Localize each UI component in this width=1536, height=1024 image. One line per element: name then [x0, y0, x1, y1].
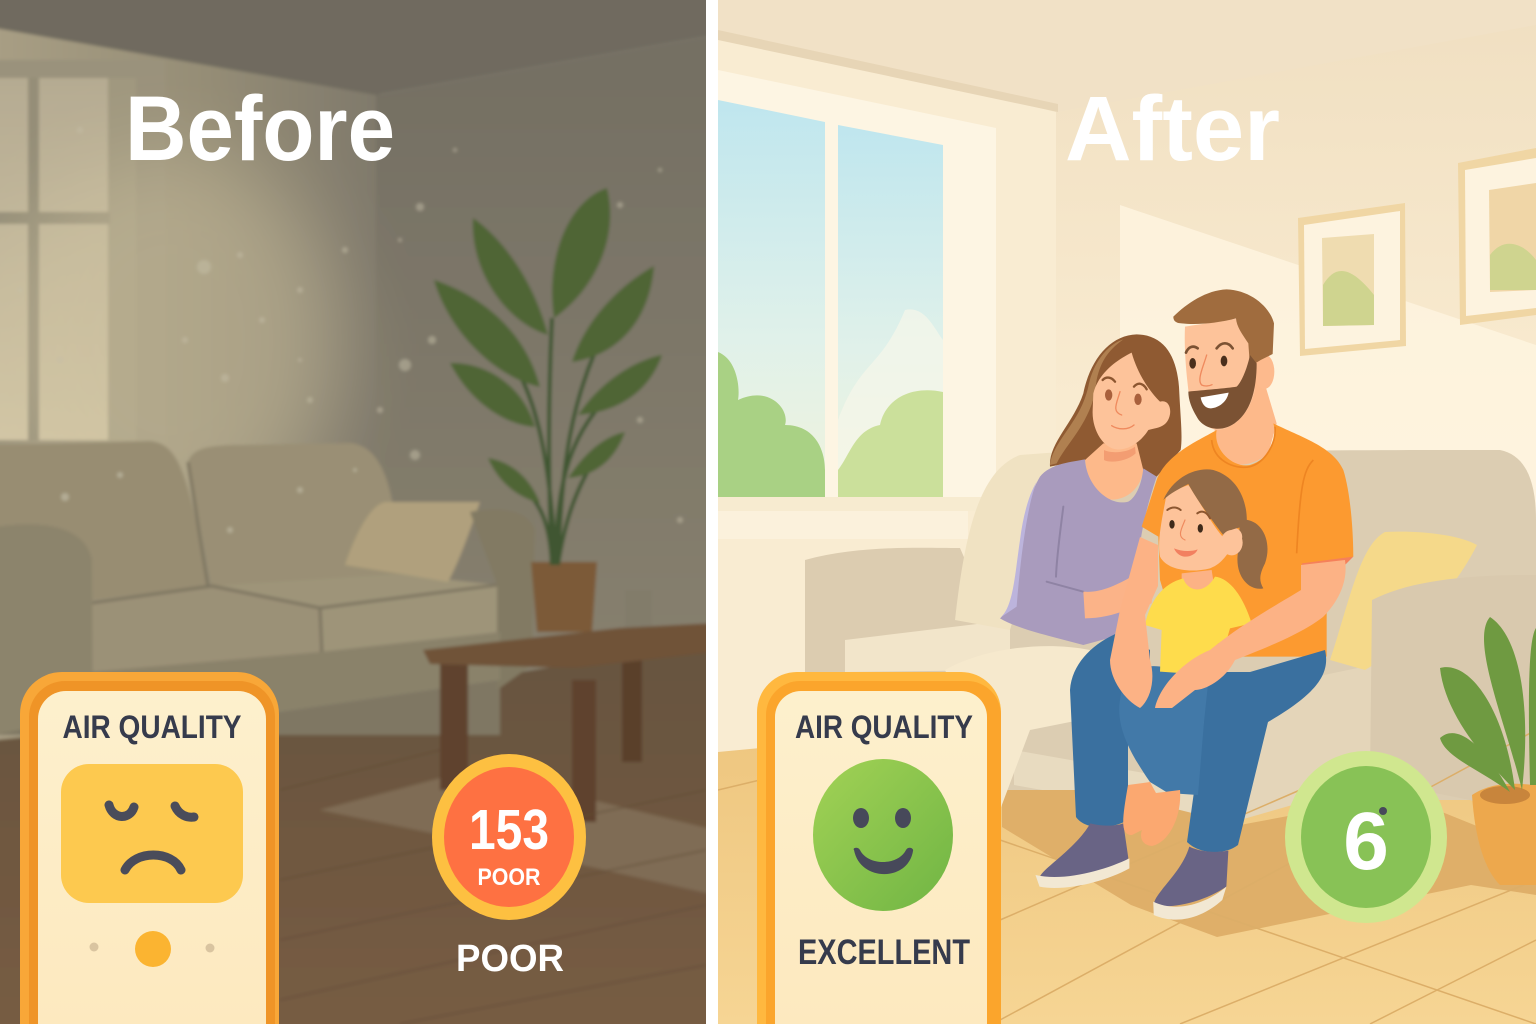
- plant: [434, 188, 662, 632]
- woman and man upper bodies: [1000, 289, 1353, 657]
- floor: [718, 725, 1536, 1024]
- sunbeam: [1120, 205, 1536, 520]
- floor boards: [280, 750, 706, 1024]
- score badge: 153 poor: 153: [469, 798, 549, 862]
- left wall: [0, 0, 380, 765]
- window: [718, 70, 998, 539]
- girl legs and feet: [1119, 665, 1210, 846]
- man shoes: [1035, 823, 1228, 920]
- sofa: [0, 441, 535, 735]
- happy face icon: [813, 759, 953, 911]
- right wall: [376, 35, 715, 700]
- air quality card: after: [757, 672, 1001, 1024]
- floor boards: [718, 730, 1536, 1024]
- light haze glow: [0, 150, 340, 530]
- card heading: AIR QUALITY: [795, 709, 973, 745]
- floor: [0, 640, 715, 1024]
- air quality card: before: [20, 672, 279, 1024]
- woman legs: [945, 646, 1090, 810]
- rug: [323, 778, 706, 894]
- dust on wall: [183, 147, 684, 524]
- ceiling: [0, 0, 715, 95]
- ceiling: [718, 0, 1536, 112]
- man: [1142, 289, 1353, 657]
- score badge: 6: [1285, 751, 1447, 923]
- ceiling molding: [718, 30, 1058, 112]
- panel: after room: [718, 0, 1536, 1024]
- indicator dots: [90, 931, 214, 967]
- girl upper body: [1145, 469, 1268, 673]
- floor shadow: [1002, 790, 1536, 937]
- picture frames: [1298, 148, 1536, 356]
- woman: [1000, 334, 1182, 645]
- sad face icon: [61, 764, 243, 903]
- title: before: Before: [125, 78, 395, 180]
- panel: before room: [0, 0, 715, 1024]
- title: after: After: [1065, 78, 1280, 180]
- label: poor: POOR: [456, 938, 564, 980]
- coffee table: [422, 622, 706, 823]
- score badge: 153 poor: [432, 754, 586, 920]
- left wall section: [718, 40, 1056, 240]
- score badge: 153 poor: POOR: [478, 864, 540, 891]
- right wall: [1040, 25, 1536, 508]
- score badge: 6: 6: [1343, 796, 1389, 887]
- houseplant: [1440, 617, 1536, 885]
- man arms and hands: [1110, 537, 1346, 708]
- rating label: EXCELLENT: [798, 933, 970, 972]
- card heading: AIR QUALITY: [62, 709, 242, 745]
- man jeans: [1070, 632, 1326, 852]
- window: [0, 60, 109, 444]
- sofa: [805, 450, 1536, 825]
